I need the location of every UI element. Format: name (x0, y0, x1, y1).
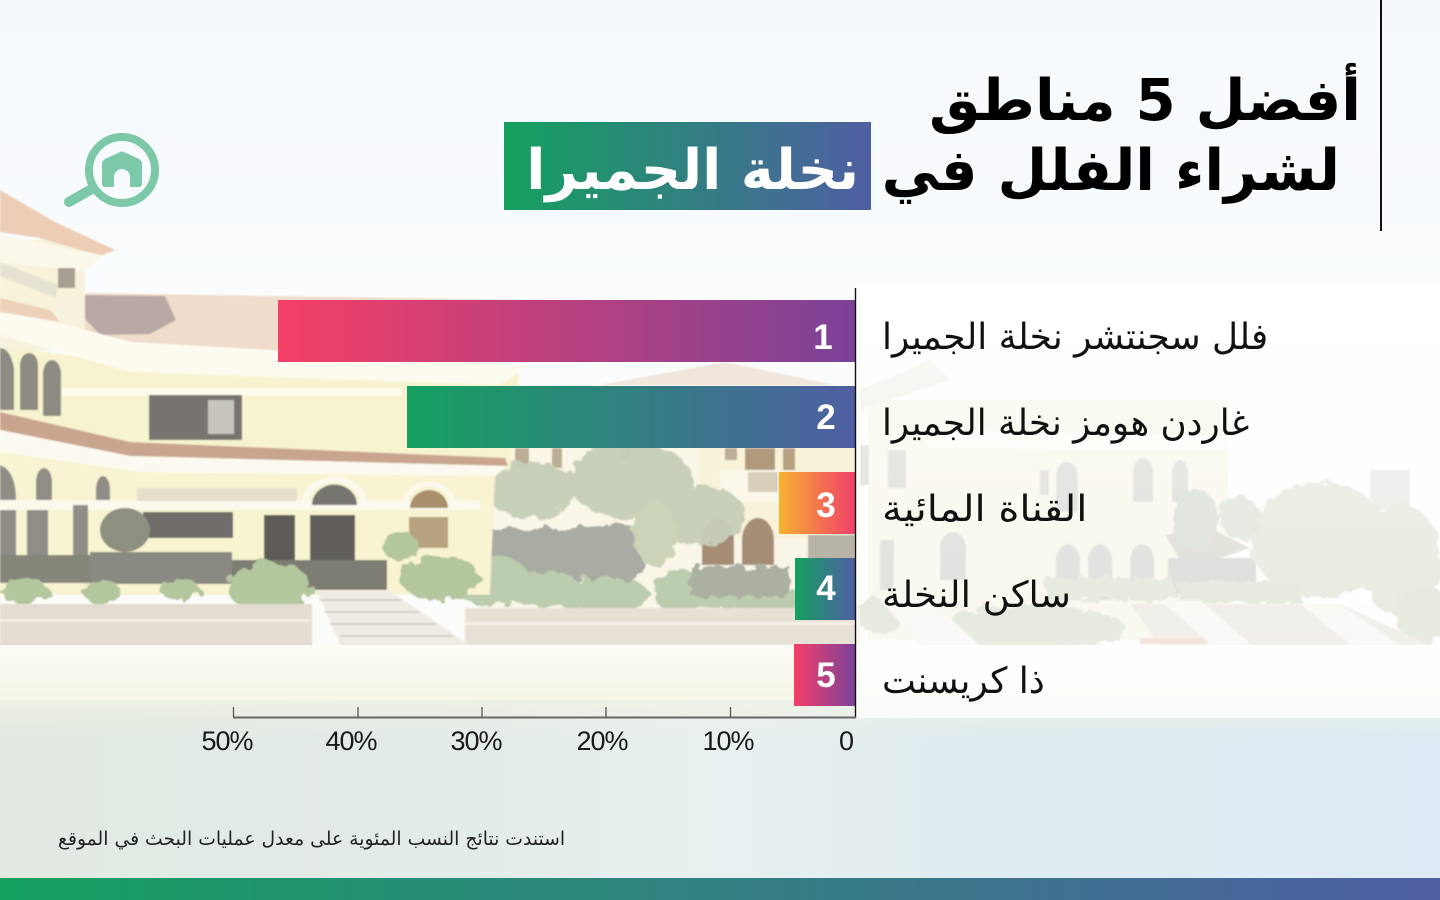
turret (0, 240, 85, 350)
value marker 5: 5 (816, 656, 836, 695)
row 2 (407, 386, 1249, 448)
tick 30%: 30% (450, 726, 502, 756)
main villa (0, 190, 530, 595)
bar 4 (795, 558, 855, 620)
value marker 1: 1 (813, 318, 833, 357)
main roof (40, 293, 530, 362)
title line 2: لشراء الفلل في (882, 137, 1340, 204)
title (504, 62, 1361, 210)
row 4 (795, 558, 1071, 620)
retaining walls (0, 604, 312, 647)
title line 1: أفضل 5 مناطق (929, 67, 1361, 134)
lower wall (0, 452, 495, 595)
icon: magnifier with house (64, 133, 159, 207)
distant villa, centre (480, 362, 865, 645)
highlighted title box (504, 122, 871, 210)
bar chart (201, 288, 1268, 756)
value marker 2: 2 (816, 398, 836, 437)
big window (149, 395, 242, 440)
vertical title rule (1380, 0, 1382, 231)
arches lower (0, 465, 110, 578)
lower roof (0, 412, 508, 466)
right villa, under panel (860, 360, 1410, 640)
bar 2 (407, 386, 855, 448)
row 1 (278, 300, 1268, 362)
tick 20%: 20% (576, 726, 628, 756)
value marker 4: 4 (816, 569, 836, 608)
bar 1 (278, 300, 855, 362)
label 3: القناة المائية (882, 489, 1087, 530)
label 5: ذا كريسنت (882, 661, 1045, 702)
tick 50%: 50% (201, 726, 253, 756)
label 1: فلل سجنتشر نخلة الجميرا (882, 317, 1268, 358)
tick 0: 0 (839, 726, 853, 756)
stairs (316, 590, 480, 655)
axis lines and ticks (232, 288, 856, 718)
tick 40%: 40% (325, 726, 377, 756)
fascia (0, 308, 530, 385)
label 4: ساكن النخلة (882, 575, 1071, 616)
bottom gradient strip (0, 878, 1440, 900)
white panel behind labels (855, 285, 1440, 718)
tick 10%: 10% (702, 726, 754, 756)
row 5 (794, 644, 1045, 706)
axis labels (201, 726, 853, 756)
water (0, 700, 1440, 900)
value marker 3: 3 (816, 486, 836, 525)
footnote: استندت نتائج النسب المئوية على معدل عمليات البحث في الموقع (58, 829, 565, 850)
bar 5 (794, 644, 855, 706)
label 2: غاردن هومز نخلة الجميرا (882, 403, 1249, 444)
highlighted title text: نخلة الجميرا (526, 138, 859, 203)
terrace + fence (90, 552, 232, 584)
row 3 (779, 472, 1087, 534)
arched windows upper (0, 348, 61, 416)
wall upper (0, 345, 520, 470)
bar 3 (779, 472, 855, 534)
sand (0, 645, 1440, 740)
